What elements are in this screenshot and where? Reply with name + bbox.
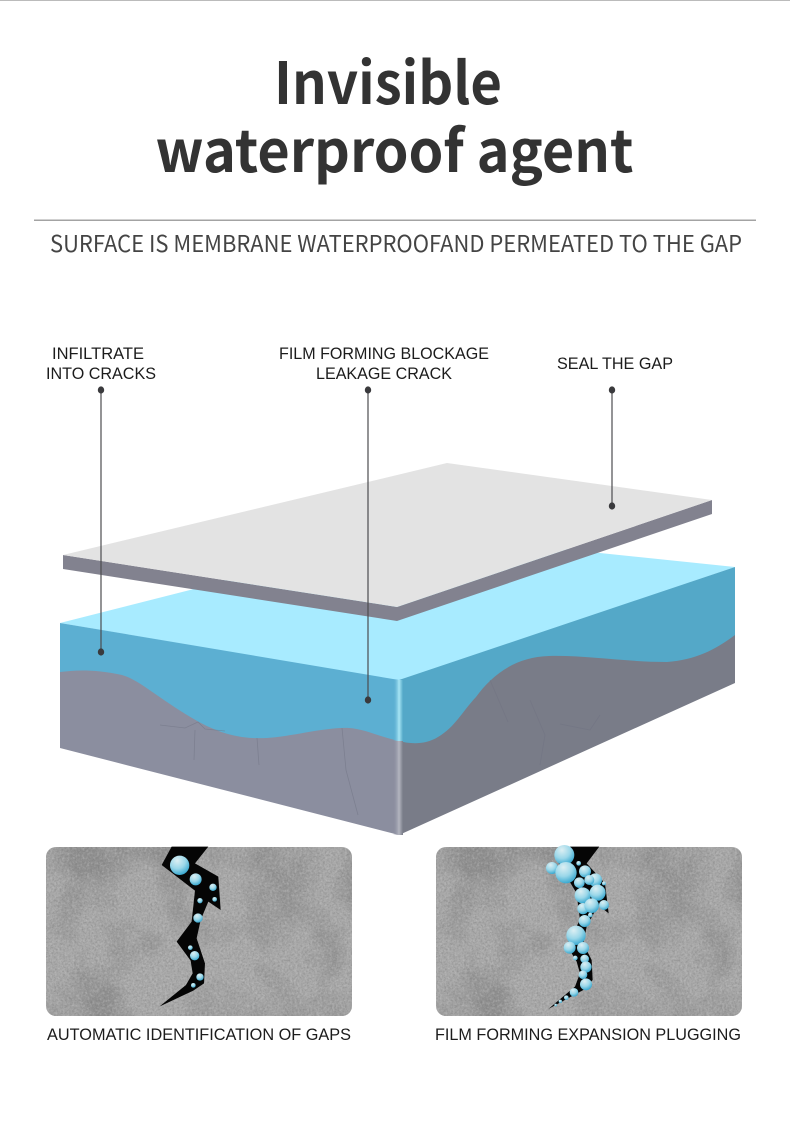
crack with bubbles: [159, 847, 221, 1007]
label: seal the gap: SEAL THE GAP: [557, 355, 673, 373]
subtitle: SURFACE IS MEMBRANE WATERPROOFAND PERMEATED TO THE GAP: [50, 225, 742, 259]
blue layer right face: [399, 567, 735, 770]
panel: automatic identification: [46, 847, 352, 1016]
title: [156, 37, 634, 189]
grey base right face: [399, 635, 735, 835]
leader line: infiltrate: [98, 386, 104, 656]
layered block diagram: [60, 463, 735, 835]
slab top face: [63, 463, 712, 607]
leader line: seal: [609, 386, 615, 510]
label: infiltrate into cracks: [46, 345, 156, 383]
crack filled with bubbles: [546, 845, 609, 1009]
label: film forming: LEAKAGE CRACK: [316, 365, 452, 383]
base front edge highlight: [393, 741, 403, 835]
panel: film forming expansion: [436, 845, 742, 1016]
caption: film forming expansion: FILM FORMING EXPANSION PLUGGING: [435, 1026, 741, 1044]
label: film forming: FILM FORMING BLOCKAGE: [279, 345, 489, 363]
blue front edge highlight: [393, 680, 403, 741]
label: infiltrate into cracks: INTO CRACKS: [46, 365, 156, 383]
caption: automatic identification: AUTOMATIC IDENTIFICATION OF GAPS: [47, 1026, 351, 1044]
label: infiltrate into cracks: INFILTRATE: [52, 345, 144, 363]
grey base left face: [60, 670, 399, 835]
slab side faces: [63, 500, 712, 621]
surface cracks: [160, 680, 600, 815]
title: waterproof agent: [156, 105, 634, 189]
label: film forming: [279, 345, 489, 383]
leader line: film forming: [365, 386, 371, 704]
title: Invisible: [274, 37, 502, 121]
blue layer left face: [60, 623, 399, 770]
blue layer top face: [60, 530, 735, 681]
